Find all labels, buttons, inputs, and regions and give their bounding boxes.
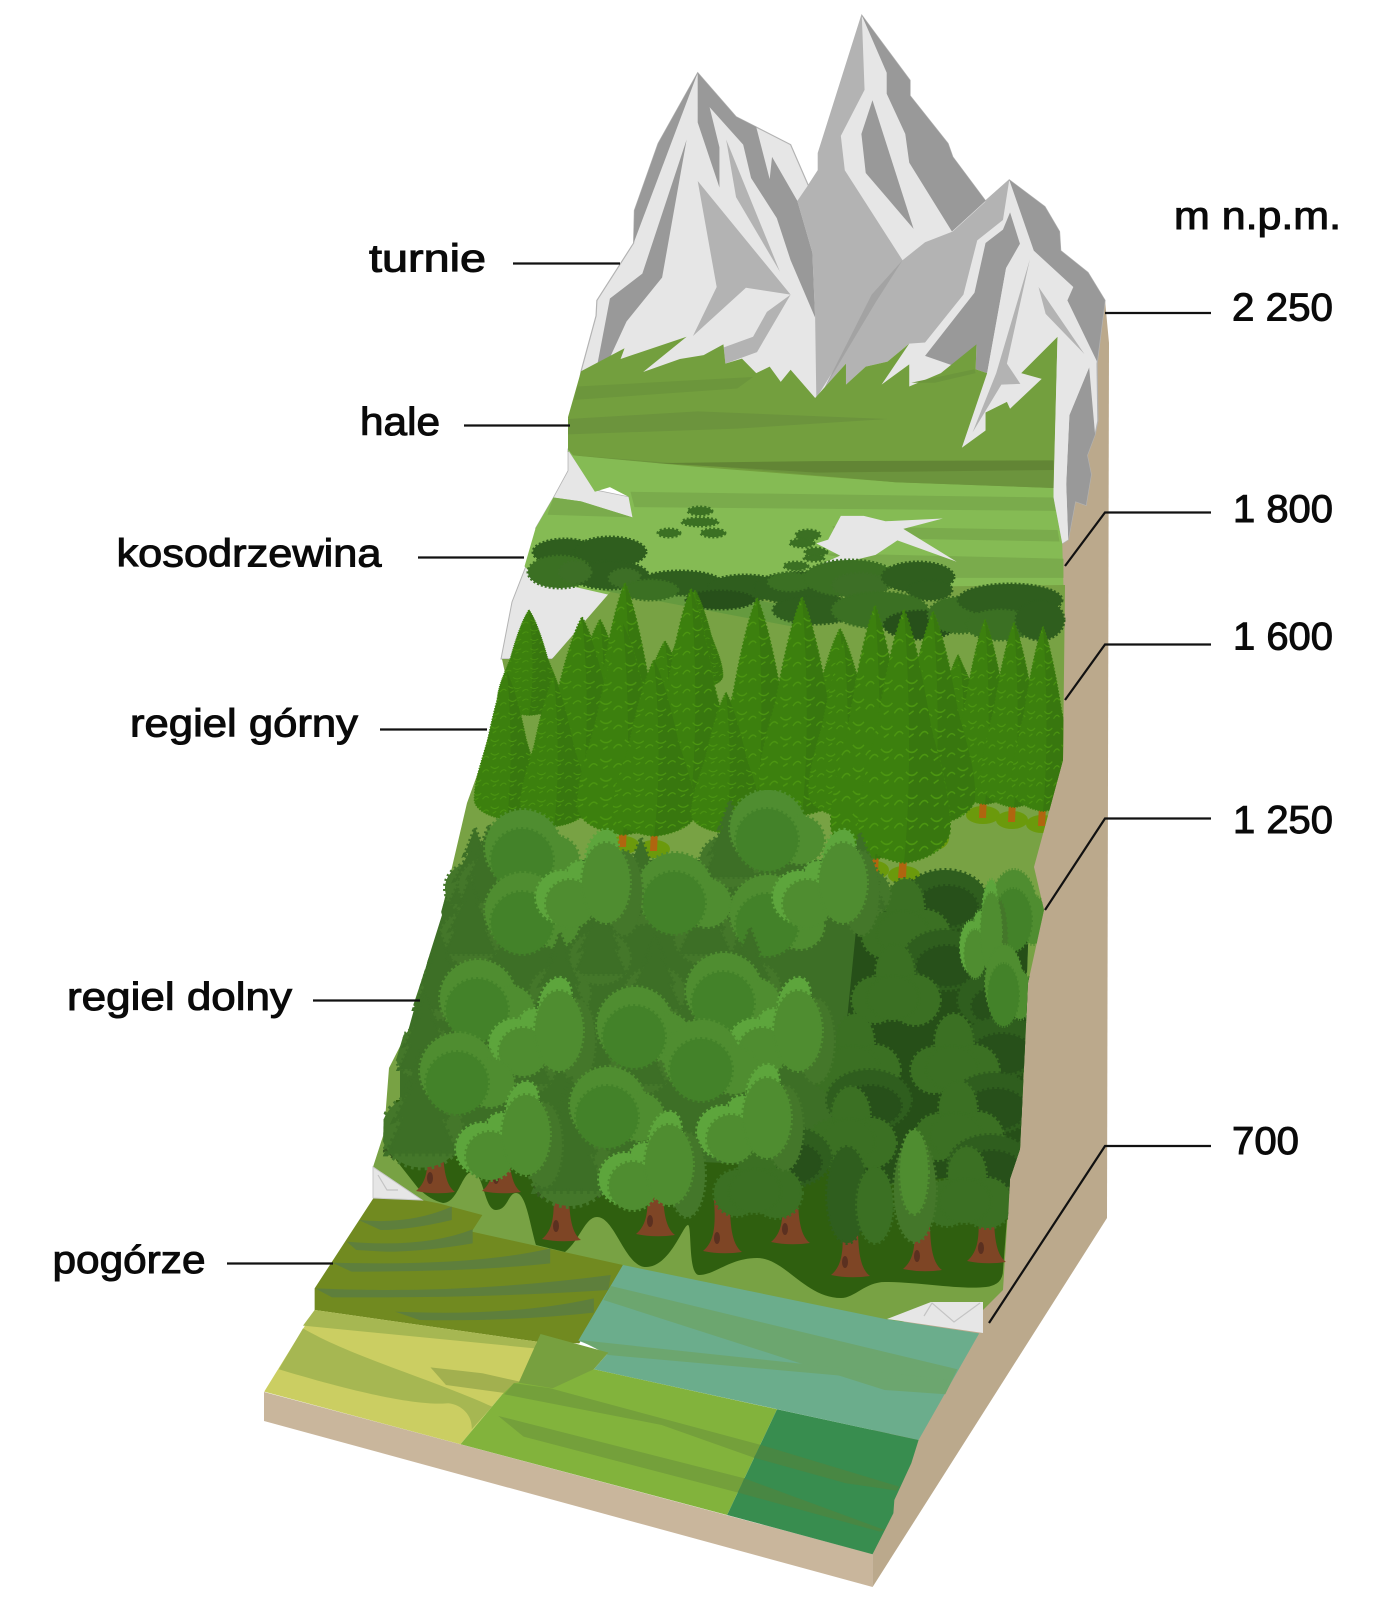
altitude 700: 700 [1232,1120,1299,1163]
altitude 2 250: 2 250 [1232,286,1333,330]
strip between dwarf pine and floor [600,578,820,628]
dark green field [727,1409,919,1554]
altitude 700 [989,1120,1299,1323]
grey rock below the meadow [501,566,625,659]
axis title: m n.p.m.: m n.p.m. [1174,195,1341,238]
left peak facets [598,73,815,364]
front trees [382,1020,1012,1228]
grey rock beside lower meadow [536,450,634,528]
label: regiel dolny: regiel dolny [67,976,293,1019]
meadows: hale [525,259,1089,628]
label: regiel górny: regiel górny [130,702,359,746]
rock wall: right side of the block [873,300,1109,1587]
middle peak facets [797,15,986,398]
right peak facets [824,180,1105,540]
rock patch bottom left [373,1167,422,1200]
spruces [672,590,724,685]
right rock pillar and shard [962,259,1089,543]
mountain silhouette [568,15,1105,543]
cypress-like trees [827,1130,936,1243]
rock wall: front side of the block [264,1392,873,1587]
altitude 1 600 [1065,616,1333,700]
forest floor [373,585,1065,1325]
mid-green trees back row [443,790,892,958]
label: kosodrzewina: kosodrzewina [116,532,382,576]
altitude 1 250 [1045,799,1333,910]
upper meadow [568,337,1058,488]
bright green field [461,1369,777,1515]
dwarf pine: kosodrzewina [528,507,1064,640]
trunks [416,1162,1006,1278]
altitude 1 800 [1065,488,1333,566]
teal field [578,1265,979,1440]
dark trees on the right [776,868,1030,1192]
small dwarf pine bushes [658,507,827,570]
light trees at right edge [960,870,1047,1026]
label: turnie: turnie [369,238,486,280]
terraced field [315,1198,623,1343]
shade and trunks [616,804,1048,882]
altitude 1 600: 1 600 [1233,616,1333,658]
altitude 1 800: 1 800 [1233,488,1333,531]
upper montane forest: regiel górny [474,583,1075,884]
yellow field [264,1310,550,1444]
mountains: turnie [568,15,1105,543]
mid-green trees middle row [395,928,834,1094]
label: pogórze: pogórze [52,1239,206,1282]
green patch [519,1334,608,1388]
foothills: pogórze [264,1198,979,1554]
lower montane forest: regiel dolny [382,790,1047,1298]
canopy backing [400,860,1030,1170]
rock patch bottom right [887,1302,983,1333]
altitude 1 250: 1 250 [1233,799,1333,842]
rock patch on meadow [816,516,957,566]
label: hale: hale [360,401,440,444]
forest ground [396,1100,1020,1298]
lower meadow [525,450,1065,628]
